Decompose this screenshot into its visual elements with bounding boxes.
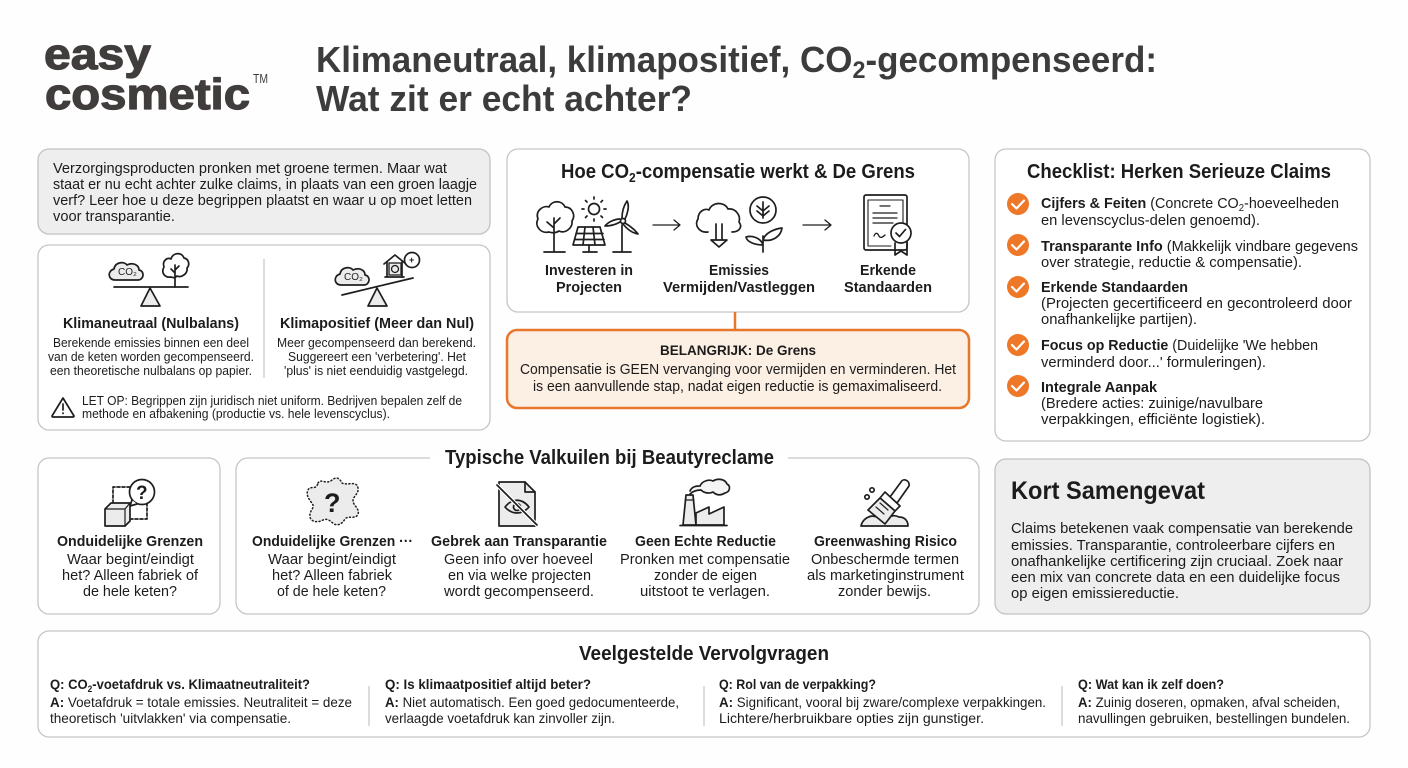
question 1 bbox=[50, 676, 352, 726]
arrow bbox=[653, 220, 680, 230]
icon: hidden document bbox=[497, 482, 537, 526]
question 3: A: Significant, vooral bij zware/complexe verpakkingen. bbox=[719, 694, 1046, 710]
icon: dotted blob with question mark: ? bbox=[324, 488, 340, 518]
text: Onduidelijke Grenzen: of de hele keten? bbox=[277, 583, 386, 600]
icon: tree, solar panel, wind turbine bbox=[537, 197, 638, 252]
callout: important boundary bbox=[507, 330, 969, 408]
title: Klimaneutraal, klimapositief, CO bbox=[316, 39, 868, 80]
text: summary body: Claims betekenen vaak compensatie van berekende bbox=[1011, 520, 1353, 537]
panel: checklist bbox=[995, 149, 1370, 441]
text: klimapositief description bbox=[277, 335, 476, 378]
icon: tilted scale with CO2 and house bbox=[335, 252, 420, 306]
panel: introduction bbox=[38, 149, 490, 234]
callout: important boundary: BELANGRIJK: De Grens bbox=[660, 342, 816, 358]
logo: easy cosmetic: easy bbox=[44, 30, 152, 79]
icon: warning triangle bbox=[52, 398, 74, 417]
heading: Typische Valkuilen bij Beautyreclame bbox=[445, 447, 774, 469]
label: Emissies Vermijden/Vastleggen: Emissies bbox=[709, 262, 769, 279]
text: Onduidelijke Grenzen bbox=[57, 533, 203, 600]
text: klimaneutraal description bbox=[48, 335, 254, 378]
text: LET OP notice: LET OP: Begrippen zijn juridisch niet uniform. Bedrijven bepalen zelf de bbox=[82, 393, 462, 408]
icon: boxes with question bubble: ? bbox=[136, 483, 148, 504]
connector to callout bbox=[734, 312, 736, 330]
item: Cijfers & Feiten: Cijfers & Feiten (Concrete CO bbox=[1041, 195, 1243, 212]
text: Onduidelijke Grenzen: Onduidelijke Grenzen bbox=[57, 533, 203, 550]
text: Greenwashing Risico: als marketinginstrument bbox=[807, 567, 965, 584]
item: Integrale Aanpak: Integrale Aanpak bbox=[1041, 379, 1158, 396]
label: Erkende Standaarden: Erkende bbox=[860, 262, 916, 279]
text: Greenwashing Risico: Greenwashing Risico bbox=[814, 533, 957, 550]
item: Integrale Aanpak: verpakkingen, efficiënte logistiek). bbox=[1041, 411, 1265, 428]
question 2: Q: Is klimaatpositief altijd beter? bbox=[385, 676, 591, 692]
item: Transparante Info: Transparante Info (Makkelijk vindbare gegevens bbox=[1041, 238, 1358, 255]
text: summary body: emissies. Transparantie, controleerbare cijfers en bbox=[1011, 537, 1335, 554]
label: Investeren in Projecten bbox=[545, 262, 633, 296]
text: Onduidelijke Grenzen: Waar begint/eindigt bbox=[67, 551, 195, 568]
text: Greenwashing Risico: Onbeschermde termen bbox=[811, 551, 959, 568]
item: Transparante Info bbox=[1007, 234, 1358, 271]
item: Erkende Standaarden: (Projecten gecertificeerd en gecontroleerd door bbox=[1041, 295, 1352, 312]
text: Gebrek aan Transparantie: Geen info over hoeveel bbox=[444, 551, 593, 568]
text: Gebrek aan Transparantie: Gebrek aan Transparantie bbox=[431, 533, 607, 550]
item: Cijfers & Feiten: -hoeveelheden bbox=[1244, 195, 1339, 212]
item: Cijfers & Feiten bbox=[1007, 193, 1339, 229]
question 1: A: Voetafdruk = totale emissies. Neutraliteit = deze bbox=[50, 694, 352, 710]
text: klimaneutraal description: een theoretische nulbalans op papier. bbox=[50, 363, 252, 378]
item: Cijfers & Feiten: en levenscyclus-delen genoemd). bbox=[1041, 212, 1260, 229]
item: Focus op Reductie: verminderd door...' formuleringen). bbox=[1041, 354, 1266, 371]
question 3: Q: Rol van de verpakking? bbox=[719, 676, 876, 692]
question 1: -voetafdruk vs. Klimaatneutraliteit? bbox=[92, 676, 310, 692]
label: Investeren in Projecten: Projecten bbox=[556, 279, 622, 296]
title: Wat zit er echt achter? bbox=[316, 78, 692, 119]
label: Investeren in Projecten: Investeren in bbox=[545, 262, 633, 279]
item: Focus op Reductie bbox=[1007, 334, 1318, 371]
panel: summary bbox=[995, 459, 1370, 614]
label: Emissies Vermijden/Vastleggen: Vermijden/Vastleggen bbox=[663, 279, 815, 296]
title bbox=[316, 39, 1157, 119]
panel: introduction: verf? Leer hoe u deze begrippen plaatst en waar u op moet letten bbox=[53, 192, 472, 209]
text: summary body bbox=[1011, 520, 1353, 602]
heading: -compensatie werkt & De Grens bbox=[636, 161, 915, 183]
heading: Kort Samengevat bbox=[1011, 477, 1206, 505]
icon: cloud with down arrows and plant bbox=[697, 197, 782, 252]
icon: greenwash paint brush bbox=[861, 480, 909, 526]
icon: boxes with question bubble bbox=[105, 480, 154, 526]
question 2 bbox=[385, 676, 679, 726]
panel: introduction: Verzorgingsproducten pronken met groene termen. Maar wat bbox=[53, 160, 448, 177]
text: Greenwashing Risico: zonder bewijs. bbox=[838, 583, 931, 600]
panel: pitfalls bbox=[236, 447, 979, 614]
text: klimaneutraal description: van de keten worden gecompenseerd. bbox=[48, 349, 254, 364]
item: Erkende Standaarden: Erkende Standaarden bbox=[1041, 279, 1188, 296]
text: summary body: een mix van concrete data en een duidelijke focus bbox=[1011, 569, 1340, 586]
question 1: Q: CO bbox=[50, 676, 90, 692]
heading: 2 bbox=[629, 170, 636, 185]
label: Emissies Vermijden/Vastleggen bbox=[663, 262, 815, 296]
text: Onduidelijke Grenzen: het? Alleen fabriek bbox=[272, 567, 392, 584]
text: Gebrek aan Transparantie: en via welke projecten bbox=[448, 567, 591, 584]
question 2: A: Niet automatisch. Een goed gedocumenteerde, bbox=[385, 694, 679, 710]
question 4: Q: Wat kan ik zelf doen? bbox=[1078, 676, 1224, 692]
item: Focus op Reductie: Focus op Reductie (Duidelijke 'We hebben bbox=[1041, 337, 1318, 354]
icon: balanced scale with CO2 and tree: CO₂ bbox=[118, 267, 137, 278]
text: summary body: op eigen emissiereductie. bbox=[1011, 585, 1179, 602]
heading: Hoe CO bbox=[561, 161, 634, 183]
text: summary body: onafhankelijke certificering zijn cruciaal. Zoek naar bbox=[1011, 553, 1343, 570]
heading: Klimapositief: Klimapositief (Meer dan Nul) bbox=[280, 315, 474, 332]
text: Geen Echte Reductie: Pronken met compensatie bbox=[620, 551, 790, 568]
icon: certificate with badge bbox=[864, 195, 911, 255]
title: -gecompenseerd: bbox=[865, 39, 1157, 80]
icon: tilted scale with CO2 and house: CO₂ bbox=[344, 272, 363, 283]
text: Geen Echte Reductie: uitstoot te verlagen. bbox=[640, 583, 770, 600]
panel: introduction: staat er nu echt achter zulke claims, in plaats van een groen laagje bbox=[53, 176, 477, 193]
text: Geen Echte Reductie: Geen Echte Reductie bbox=[635, 533, 776, 550]
panel: how compensation works bbox=[507, 149, 969, 312]
logo: easy cosmetic: cosmetic bbox=[45, 70, 250, 119]
icon: dotted blob with question mark bbox=[307, 478, 358, 525]
question 2: verlaagde voetafdruk kan zinvoller zijn. bbox=[385, 710, 615, 726]
text: Onduidelijke Grenzen: Onduidelijke Grenzen ··· bbox=[252, 533, 413, 550]
text: Onduidelijke Grenzen bbox=[252, 533, 413, 600]
heading: Veelgestelde Vervolgvragen bbox=[579, 643, 829, 665]
item: Erkende Standaarden bbox=[1007, 276, 1352, 328]
icon: factory with smoke bbox=[680, 479, 729, 526]
text: Onduidelijke Grenzen: de hele keten? bbox=[83, 583, 177, 600]
text: Geen Echte Reductie bbox=[620, 533, 790, 600]
question 4: navullingen gebruiken, bestellingen bundelen. bbox=[1078, 710, 1350, 726]
item: Cijfers & Feiten: 2 bbox=[1239, 203, 1244, 214]
question 4: A: Zuinig doseren, opmaken, afval scheiden, bbox=[1078, 694, 1340, 710]
text: Gebrek aan Transparantie: wordt gecompenseerd. bbox=[443, 583, 594, 600]
title: 2 bbox=[852, 57, 865, 84]
text: Greenwashing Risico bbox=[807, 533, 965, 600]
item: Integrale Aanpak: (Bredere acties: zuinige/navulbare bbox=[1041, 395, 1263, 412]
text: Onduidelijke Grenzen: het? Alleen fabriek of bbox=[62, 567, 199, 584]
question 1: theoretisch 'uitvlakken' via compensatie. bbox=[50, 710, 291, 726]
text: Gebrek aan Transparantie bbox=[431, 533, 607, 600]
text: klimapositief description: Suggereert een 'verbetering'. Het bbox=[288, 349, 466, 364]
panel: FAQ bbox=[38, 631, 1370, 737]
logo: easy cosmetic: TM bbox=[253, 72, 268, 86]
arrow bbox=[803, 220, 831, 230]
panel: pitfall single card bbox=[38, 458, 220, 614]
text: klimaneutraal description: Berekende emissies binnen een deel bbox=[53, 335, 249, 350]
text: klimapositief description: 'plus' is niet eenduidig vastgelegd. bbox=[284, 363, 468, 378]
panel: definitions bbox=[38, 245, 490, 430]
callout: important boundary: Compensatie is GEEN vervanging voor vermijden en verminderen. Het bbox=[520, 361, 957, 378]
item: Transparante Info: over strategie, reductie & compensatie). bbox=[1041, 254, 1302, 271]
question 1: 2 bbox=[88, 684, 92, 694]
text: LET OP notice bbox=[82, 393, 462, 421]
text: Geen Echte Reductie: zonder de eigen bbox=[654, 567, 757, 584]
panel: introduction: voor transparantie. bbox=[53, 208, 175, 225]
logo: easy cosmetic bbox=[44, 30, 268, 119]
text: LET OP notice: methode en afbakening (productie vs. hele levenscyclus). bbox=[82, 406, 390, 421]
label: Erkende Standaarden bbox=[844, 262, 932, 296]
label: Erkende Standaarden: Standaarden bbox=[844, 279, 932, 296]
icon: tilted scale with CO2 and house: + bbox=[409, 255, 414, 265]
text: klimapositief description: Meer gecompenseerd dan berekend. bbox=[277, 335, 476, 350]
text: Onduidelijke Grenzen: Waar begint/eindigt bbox=[268, 551, 397, 568]
item: Erkende Standaarden: onafhankelijke partijen). bbox=[1041, 311, 1197, 328]
question 3 bbox=[719, 676, 1046, 726]
heading: Checklist: Herken Serieuze Claims bbox=[1027, 161, 1331, 183]
question 4 bbox=[1078, 676, 1350, 726]
heading: Klimaneutraal: Klimaneutraal (Nulbalans) bbox=[63, 315, 239, 332]
question 3: Lichtere/herbruikbare opties zijn gunstiger. bbox=[719, 710, 984, 726]
icon: balanced scale with CO2 and tree bbox=[109, 254, 189, 306]
item: Integrale Aanpak bbox=[1007, 375, 1265, 428]
callout: important boundary: is een aanvullende stap, nadat eigen reductie is gemaximaliseerd. bbox=[533, 378, 942, 395]
